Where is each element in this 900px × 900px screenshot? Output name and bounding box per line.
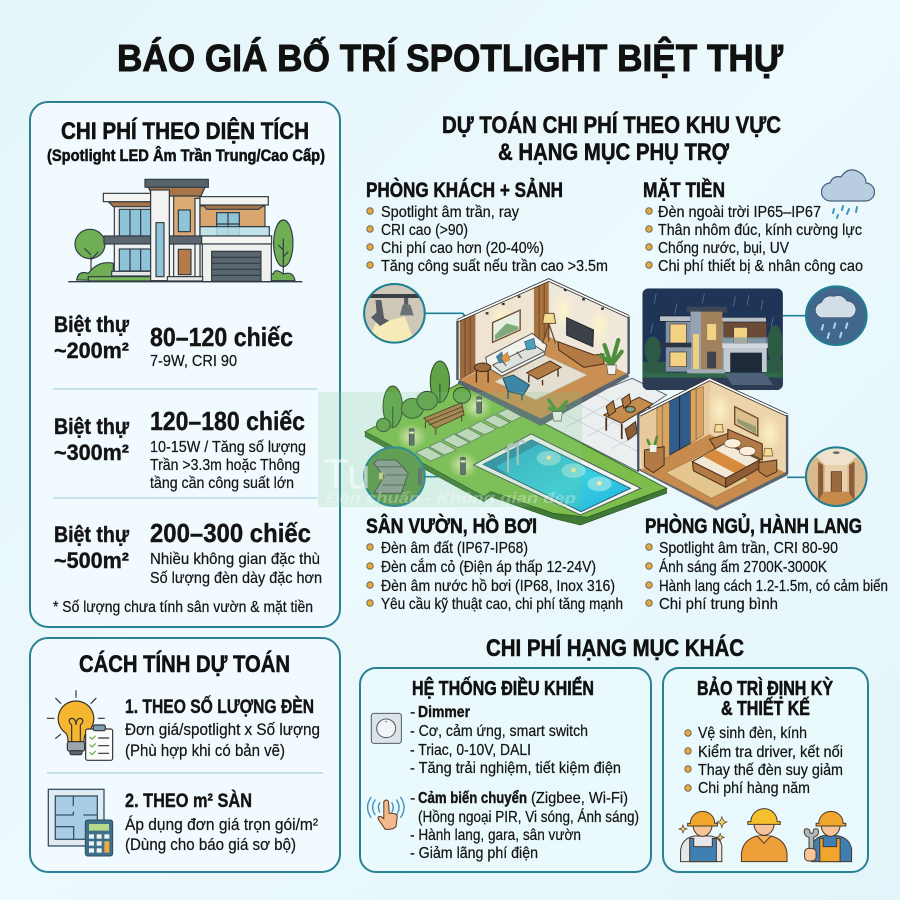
maintenance bullet list: Thay thế đèn suy giảm [698,762,843,779]
watermark: Tu [323,450,370,497]
inset circle: garden path [363,447,425,507]
pool [474,434,641,515]
sofa [486,333,547,376]
text block: facade: Đèn ngoài trời IP65–IP67 [658,204,821,221]
watermark: Đèn chuẩn - Không gian đẹp [326,490,576,507]
panel: control system [360,668,651,872]
panel: maintenance [663,668,868,872]
text block: living room and lobby: CRI cao (>90) [381,222,468,239]
row: villa 300 m2: Trần >3.3m hoặc Thông [150,457,300,474]
text block: garden and pool [366,514,623,613]
row: villa 200 m2: ~200m² [54,338,129,363]
inset circle: hallway [804,447,870,510]
bench [424,403,464,435]
maintenance bullet list [685,725,843,797]
row: villa 300 m2 [54,406,306,492]
bedroom [638,379,788,511]
heading: estimate by zone: & HẠNG MỤC PHỤ TRỢ [498,139,729,166]
dining table [604,394,653,440]
row: villa 500 m2: 200–300 chiếc [150,518,311,548]
dimmer text: Dimmer [418,704,470,721]
sensor text: - Hành lang, gara, sân vườn [410,827,581,844]
heading: maintenance [697,676,834,720]
bollards [409,397,482,475]
method 1 text: 1. THEO SỐ LƯỢNG ĐÈN [125,694,314,718]
row: villa 500 m2: Số lượng đèn dày đặc hơn [150,570,322,587]
sensor text [410,789,639,862]
row: villa 300 m2: 120–180 chiếc [150,406,305,436]
row: villa 300 m2: ~300m² [54,440,129,465]
sensor text: - [410,790,415,807]
icon: light bulb and checklist [47,691,113,760]
facade night photo [642,288,783,390]
method 1 text: Đơn giá/spotlight x Số lượng [125,720,320,739]
sensor text: (Zigbee, Wi-Fi) [531,790,628,807]
text block: facade: MẶT TIỀN [643,179,725,202]
text block: living room and lobby: Spotlight âm trần, ray [381,204,519,221]
text block: living room and lobby: Chi phí cao hơn (20-40%) [381,240,544,257]
title: BÁO GIÁ BỐ TRÍ SPOTLIGHT BIỆT THỰ [117,35,783,80]
text block: garden and pool: Đèn âm đất (IP67-IP68) [381,540,528,557]
dimmer text: - Tăng trải nghiệm, tiết kiệm điện [410,760,621,777]
row: villa 200 m2: 80–120 chiếc [150,322,293,352]
garden [365,361,667,525]
text block: garden and pool: SÂN VƯỜN, HỒ BƠI [366,514,537,538]
row: villa 500 m2: Biệt thự [54,522,129,547]
heading: control system: HỆ THỐNG ĐIỀU KHIỂN [412,676,594,700]
icon: modern villa [68,179,302,282]
inset circle: rain cloud [804,285,870,348]
text block: garden and pool: Đèn âm nước hồ bơi (IP68, Inox 316) [381,578,615,595]
heading: estimate by zone [442,111,781,166]
sensor text: Cảm biến chuyển [418,789,527,807]
worker with wrench [804,811,852,862]
inset circle: track spotlights [363,283,425,343]
icon: rain cloud [821,170,875,218]
icon: floor plan and calculator [48,789,113,856]
text block: bedroom and hallway: Ánh sáng ấm 2700K-3000K [659,557,827,576]
maintenance bullet list: Vệ sinh đèn, kính [698,725,807,742]
living room [457,280,629,426]
icon: three workers [679,809,852,862]
worker in orange [741,809,787,862]
maintenance bullet list: Kiểm tra driver, kết nối [698,743,843,761]
text block: facade: Thân nhôm đúc, kính cường lực [658,222,862,239]
row: villa 200 m2: 7-9W, CRI 90 [150,353,237,370]
worker with overalls [679,811,727,862]
method 1 text [125,694,320,760]
panel heading: cost by area [47,117,325,165]
heading: other costs: CHI PHÍ HẠNG MỤC KHÁC [486,634,744,662]
tile floor [541,378,667,472]
text block: bedroom and hallway [645,514,888,613]
heading: estimate by zone: DỰ TOÁN CHI PHÍ THEO KHU VỰC [442,111,781,139]
heading: maintenance: BẢO TRÌ ĐỊNH KỲ [697,676,834,700]
text block: living room and lobby: Tăng công suất nếu trần cao >3.5m [381,258,608,275]
text block: living room and lobby [366,178,608,275]
dimmer text: - Triac, 0-10V, DALI [410,742,531,759]
text block: facade [643,179,863,275]
method 2 text [125,789,318,854]
row: villa 300 m2: Biệt thự [54,414,129,439]
row: villa 200 m2 [54,312,293,370]
panel heading: cost by area: (Spotlight LED Âm Trần Trung/Cao Cấp) [47,146,325,165]
heading: maintenance: & THIẾT KẾ [721,697,810,720]
row: villa 500 m2: ~500m² [54,548,129,573]
dimmer text [410,704,621,777]
row: villa 500 m2 [54,518,322,587]
text block: garden and pool: Đèn cắm cỏ (Điện áp thấp 12-24V) [381,557,596,576]
method 2 text: (Dùng cho báo giá sơ bộ) [125,835,296,854]
watermark [318,392,582,507]
text block: living room and lobby: PHÒNG KHÁCH + SẢNH [366,178,563,202]
text block: bedroom and hallway: Spotlight âm trần, CRI 80-90 [659,540,838,557]
icon: dimmer [371,713,401,743]
dimmer text: - [410,704,415,721]
row: villa 200 m2: Biệt thự [54,312,129,337]
maintenance bullet list: Chi phí hàng năm [698,780,810,797]
panel: cost by floor area [30,102,340,627]
panel: estimating method [30,638,340,872]
sensor text: - Giảm lãng phí điện [410,845,538,862]
sensor text: (Hồng ngoại PIR, Vi sóng, Ánh sáng) [418,807,639,826]
method 1 text: (Phù hợp khi có bản vẽ) [125,741,285,760]
row: villa 300 m2: tầng cần công suất lớn [150,475,294,492]
footnote: * Số lượng chưa tính sân vườn & mặt tiền [53,599,313,616]
text block: garden and pool: Yêu cầu kỹ thuật cao, chi phí tăng mạnh [381,596,623,613]
row: villa 300 m2: 10-15W / Tăng số lượng [150,439,306,456]
panel heading: cost by area: CHI PHÍ THEO DIỆN TÍCH [61,117,309,145]
connector lines [425,313,806,477]
icon: motion sensor hand [368,797,404,829]
dimmer text: - Cơ, cảm ứng, smart switch [410,723,588,740]
text block: facade: Chống nước, bụi, UV [658,240,789,257]
method 2 text: Áp dụng đơn giá trọn gói/m² [125,815,318,834]
heading: estimating method: CÁCH TÍNH DỰ TOÁN [79,650,290,678]
method 2 text: 2. THEO m² SÀN [125,789,252,812]
text block: facade: Chi phí thiết bị & nhân công cao [658,258,863,275]
text block: bedroom and hallway: Chi phí trung bình [659,596,778,613]
row: villa 500 m2: Nhiều không gian đặc thù [150,551,320,568]
isometric villa scene [363,280,870,525]
